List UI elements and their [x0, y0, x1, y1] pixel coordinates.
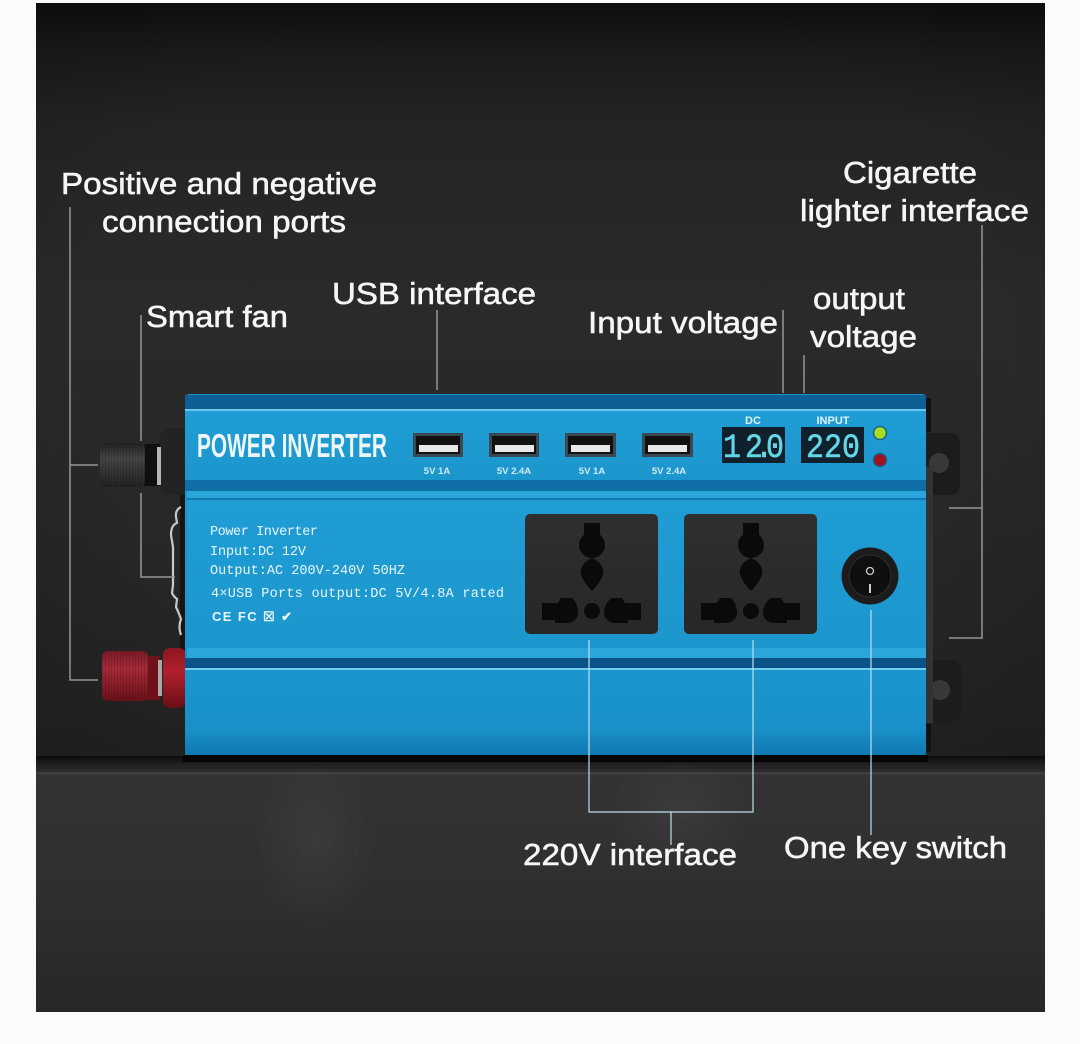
heading: POWER INVERTER: POWER INVERTER	[197, 427, 387, 464]
specification text: Input:DC 12V	[210, 545, 307, 560]
body side edge	[180, 490, 187, 650]
USB port 3: 5V 1A	[579, 466, 605, 477]
label: output voltage: voltage	[810, 319, 917, 354]
positive terminal	[102, 648, 186, 708]
wire clip	[171, 507, 181, 635]
metal body	[185, 394, 926, 755]
label: positive and negative connection ports: connection ports	[102, 204, 346, 239]
label: cigarette lighter interface: Cigarette	[843, 155, 977, 190]
USB port 4: 5V 2.4A	[652, 466, 686, 477]
USB port 1: 5V 1A	[424, 466, 450, 477]
USB port 2	[489, 433, 539, 477]
line: cigarette lighter	[949, 225, 982, 638]
specification text: CE FC ☒ ✔	[212, 609, 292, 624]
USB port 1	[413, 433, 463, 477]
AC socket 1	[525, 514, 658, 634]
specification text	[210, 525, 504, 624]
label: cigarette lighter interface	[800, 155, 1029, 228]
USB ports	[413, 433, 693, 477]
label: positive and negative connection ports	[61, 166, 377, 239]
label: positive and negative connection ports: Positive and negative	[61, 166, 377, 201]
label: output voltage	[810, 281, 917, 354]
input voltage display: 220	[806, 428, 860, 468]
specification text: Power Inverter	[210, 525, 318, 540]
DC voltage display: DC	[745, 415, 761, 427]
line: positive and negative ports	[70, 207, 98, 680]
DC voltage display: 12.0	[723, 428, 784, 468]
label: output voltage: output	[813, 281, 905, 316]
specification text: 4×USB Ports output:DC 5V/4.8A rated	[211, 587, 504, 602]
negative terminal	[100, 428, 186, 495]
label: input voltage: Input voltage	[588, 305, 778, 340]
line: smart fan	[141, 315, 175, 577]
label: one key switch: One key switch	[784, 830, 1007, 865]
label: 220V interface: 220V interface	[523, 837, 737, 872]
line: switch	[870, 610, 872, 835]
USB port 3	[565, 433, 616, 477]
rocker switch	[842, 548, 898, 604]
line: input voltage	[782, 310, 784, 393]
label: USB interface: USB interface	[332, 276, 536, 311]
line: USB	[436, 310, 438, 390]
mounting brackets	[926, 398, 961, 752]
line: output voltage	[803, 355, 805, 393]
line: 220V sockets	[589, 640, 753, 845]
AC socket 2	[684, 514, 817, 634]
callout lines	[70, 207, 982, 845]
inverter device	[100, 394, 961, 755]
input voltage display	[801, 415, 864, 468]
input voltage display: INPUT	[816, 415, 850, 427]
USB port 4	[642, 433, 693, 477]
specification text: Output:AC 200V-240V 50HZ	[210, 564, 405, 579]
label: smart fan: Smart fan	[146, 299, 288, 334]
indicator LEDs	[874, 426, 886, 466]
label: cigarette lighter interface: lighter interface	[800, 193, 1029, 228]
USB port 2: 5V 2.4A	[497, 466, 531, 477]
